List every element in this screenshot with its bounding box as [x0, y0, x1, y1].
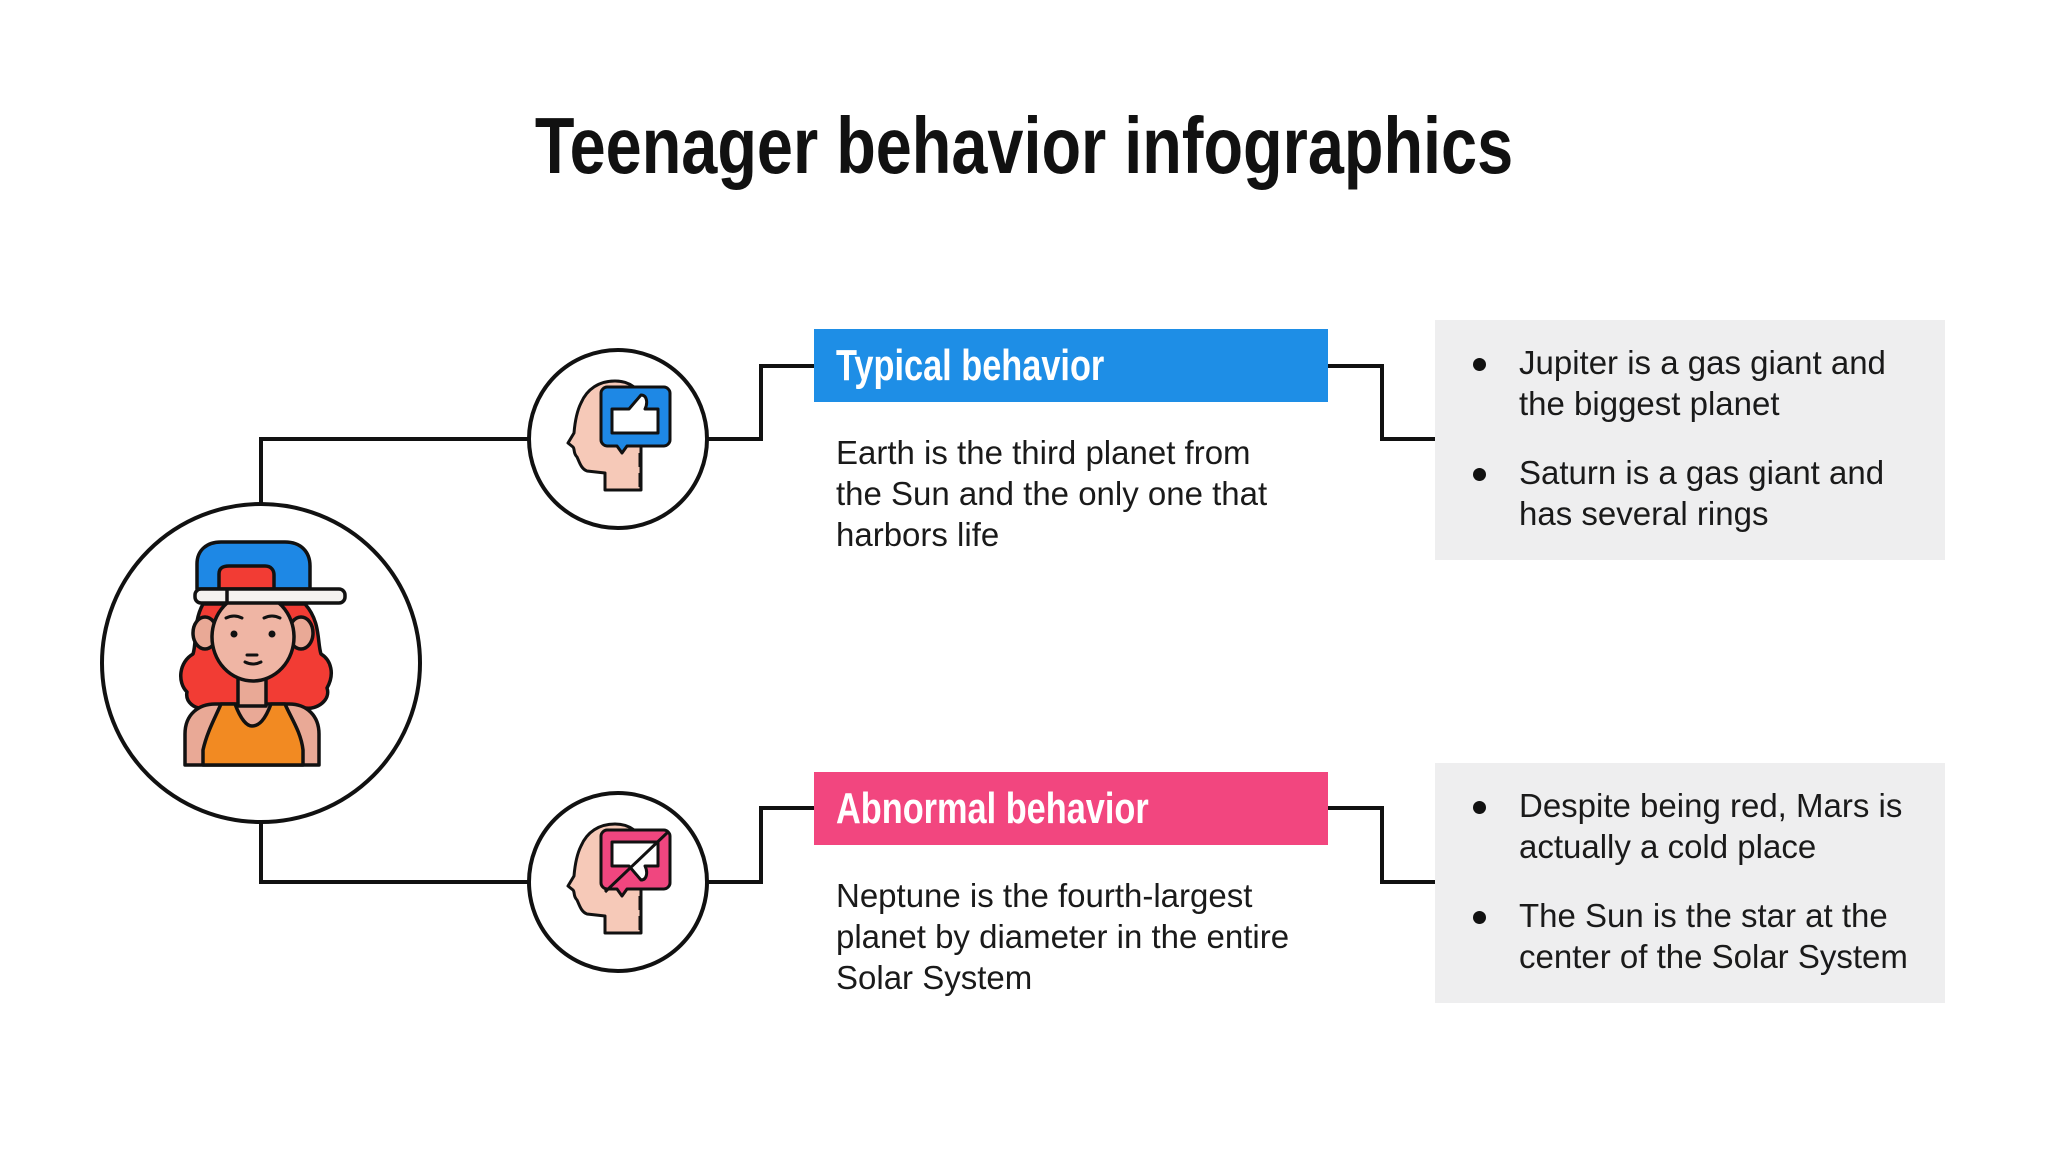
panel: abnormal behavior header: Abnormal behavior: [836, 784, 1149, 833]
title: Teenager behavior infographics: [535, 101, 1513, 190]
panel: typical bullets: [1435, 320, 1945, 560]
panel: typical bullets: Saturn is a gas giant and has several rings: [1519, 454, 1884, 532]
panel: abnormal bullets: Despite being red, Mars is actually a cold place: [1519, 787, 1902, 865]
text block: typical description: Earth is the third planet from the Sun and the only one that harbors life: [836, 434, 1267, 553]
panel: typical behavior header: [814, 329, 1328, 402]
panel: typical bullets: Jupiter is a gas giant and the biggest planet: [1519, 344, 1886, 422]
panel: abnormal bullets: The Sun is the star at the center of the Solar System: [1519, 897, 1908, 975]
panel: typical behavior header: Typical behavior: [836, 341, 1104, 390]
panel: abnormal bullets: [1435, 763, 1945, 1003]
panel: abnormal behavior header: [814, 772, 1328, 845]
text block: abnormal description: Neptune is the fourth-largest planet by diameter in the entire Solar System: [836, 877, 1289, 996]
